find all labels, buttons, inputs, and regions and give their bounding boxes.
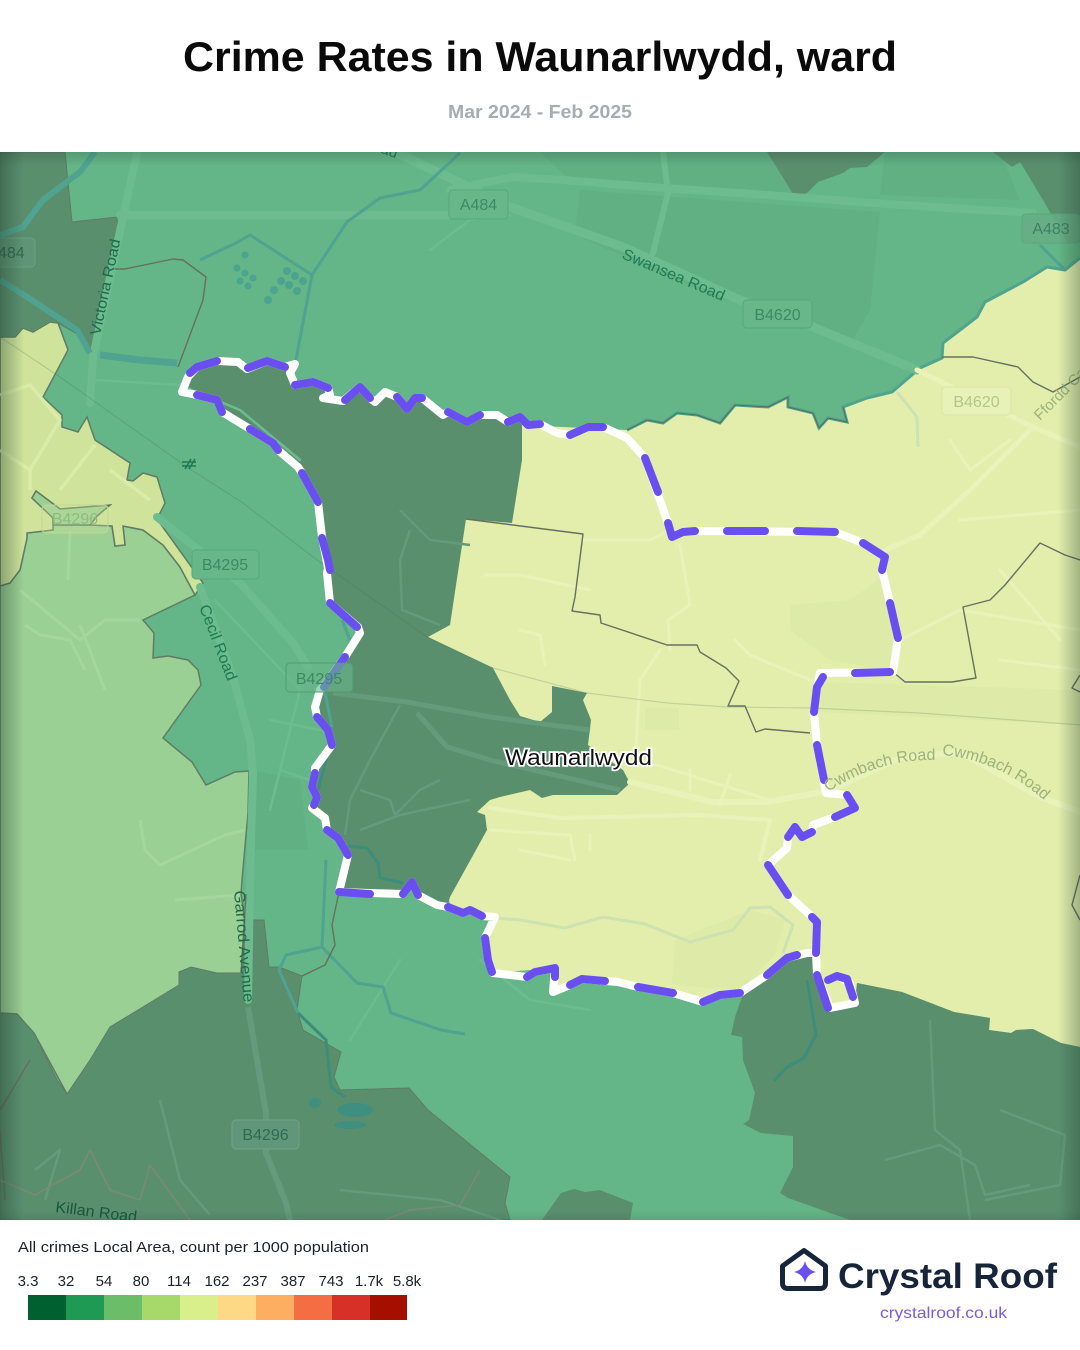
- road shield: A484: [449, 190, 508, 219]
- area: dark green ward west: [182, 361, 630, 907]
- road shield: A483: [1022, 214, 1080, 243]
- roads on pale yellow-green west: [0, 385, 150, 500]
- reservoir dots: [234, 252, 307, 304]
- legend values: 114: [167, 1273, 191, 1290]
- legend title: All crimes Local Area, count per 1000 population: [18, 1239, 369, 1256]
- legend: [18, 1239, 422, 1320]
- area: dark green north centre: [767, 152, 885, 197]
- road shield: B4620 green: B4620: [754, 307, 801, 324]
- ward boundary: white casing: [182, 361, 898, 1008]
- logo: Crystal Roof: [782, 1250, 1057, 1322]
- area: dark green south-east: [731, 955, 1080, 1220]
- area: dark green top-left: [0, 152, 118, 356]
- road shield: B4296 south: [232, 1120, 299, 1149]
- green field patches: [250, 152, 1020, 850]
- map edge vignette: [0, 152, 1080, 1220]
- area: dark green north east: [993, 152, 1080, 242]
- road label: Cwmbach Road east: Cwmbach Road: [943, 744, 1051, 800]
- road shield: B4620 yellow: B4620: [953, 394, 1000, 411]
- place label: Waunarlwydd: Waunarlwydd: [505, 745, 652, 770]
- yellow field patches: [645, 575, 1080, 990]
- icon: railway station: [182, 459, 196, 469]
- road shield: B4620 yellow: [942, 387, 1011, 415]
- legend values: 5.8k: [393, 1273, 422, 1290]
- road shield: A484: A484: [460, 197, 497, 214]
- legend values: 3.3: [18, 1273, 38, 1290]
- road shield: B4295 lower: B4295: [296, 671, 342, 688]
- roads on dark green: [35, 510, 1065, 1220]
- area: light green south-west: [0, 525, 249, 1094]
- legend colour scale: [28, 1295, 407, 1320]
- rivers and streams: [0, 152, 1065, 1034]
- legend values: 743: [318, 1273, 344, 1290]
- legend values: [18, 1273, 422, 1290]
- legend values: 1.7k: [355, 1273, 384, 1290]
- area: pale yellow-green west: [0, 322, 203, 595]
- river edge along northern boundary: [627, 258, 1080, 430]
- road shield: B4295 lower: [286, 663, 353, 692]
- road label: Swansea Road: Swansea Road: [619, 246, 727, 305]
- website url: crystalroof.co.uk: [880, 1305, 1008, 1322]
- road label: Killan Road: Killan Road: [55, 1199, 138, 1226]
- road shield: B4296 west: [42, 505, 108, 533]
- road shield: B4295 upper: [192, 550, 259, 579]
- sub-area boundary lines: [0, 259, 1080, 1220]
- road shield: B4296 west: B4296: [52, 511, 98, 528]
- legend values: 162: [204, 1273, 230, 1290]
- roads on light green: [20, 530, 245, 900]
- area: small green pocket: [32, 491, 110, 525]
- road shield: B4620 green: [743, 300, 812, 328]
- road label: Cecil Road: Cecil Road: [195, 602, 240, 683]
- roads on green: [90, 152, 922, 1004]
- subtitle: date range: Mar 2024 - Feb 2025: [448, 102, 632, 122]
- legend values: 237: [242, 1273, 268, 1290]
- road shield: B4296 south: B4296: [242, 1127, 289, 1144]
- road shield: A483: A483: [1032, 221, 1070, 238]
- icon: house: [782, 1250, 826, 1288]
- road shield: B4295 upper: B4295: [202, 557, 248, 574]
- road label: Garrod Avenue: Garrod Avenue: [230, 890, 257, 1003]
- railway line: [0, 337, 1080, 725]
- area: dark green south-west: [0, 920, 510, 1220]
- ponds: [309, 1098, 373, 1129]
- road label: Cwmbach Road west: Cwmbach Road: [824, 748, 934, 790]
- road shield: A484 clipped: [0, 238, 35, 267]
- pale roads on yellow: [485, 370, 1080, 860]
- title: Crime Rates in Waunarlwydd, ward: [183, 33, 897, 80]
- area: mid-green base: [0, 152, 1080, 1220]
- ward boundary: purple dashes: [190, 361, 898, 1008]
- legend values: 387: [280, 1273, 306, 1290]
- area: dark green south patch: [542, 1189, 633, 1220]
- road label: Road clipped top: Road: [361, 134, 400, 162]
- road label: Victoria Road: Victoria Road: [87, 237, 124, 337]
- legend values: 32: [58, 1273, 74, 1290]
- area: pale yellow east: [415, 258, 1080, 1047]
- logo wordmark: Crystal Roof: [838, 1257, 1057, 1296]
- legend values: 54: [96, 1273, 112, 1290]
- icon: crystal star: [794, 1261, 816, 1283]
- stream across yellow: [495, 907, 793, 953]
- legend values: 80: [133, 1273, 149, 1290]
